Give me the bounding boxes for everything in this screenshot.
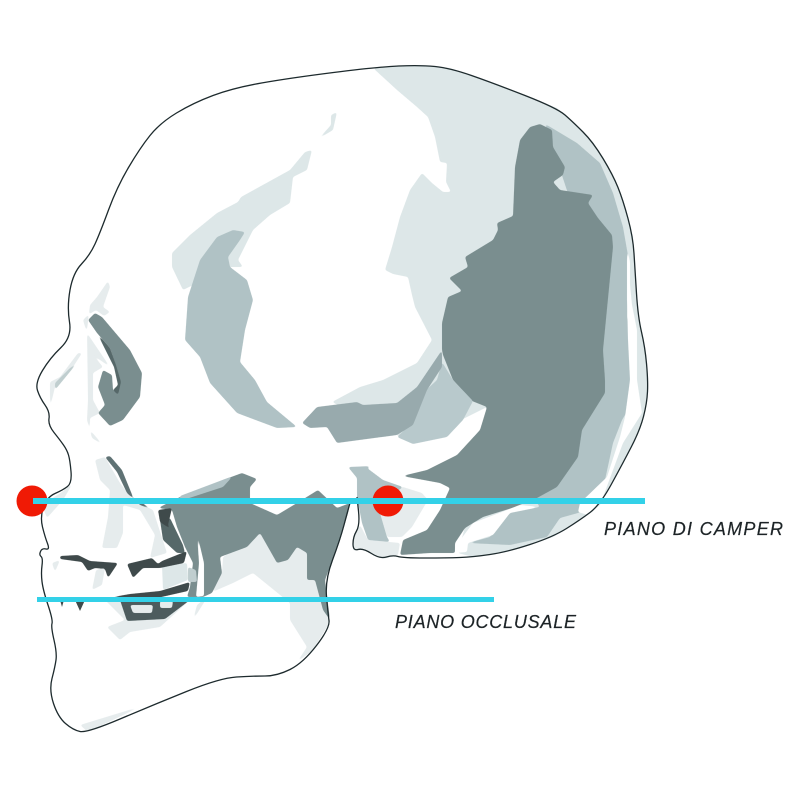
joint area inner light <box>380 487 428 537</box>
orbit inner dark edge <box>97 333 121 395</box>
mid-grey: temporal fossa <box>185 230 297 428</box>
nasal bone light <box>50 353 82 408</box>
red landmark: nose <box>16 486 48 516</box>
occlusal plane line <box>37 597 494 602</box>
label: piano di camper: PIANO DI CAMPER <box>604 519 783 539</box>
nasal bone mid <box>55 362 78 390</box>
skull outline <box>37 66 648 732</box>
aperture edge dark <box>105 456 153 510</box>
teeth pale right <box>188 567 197 582</box>
joint area light <box>353 525 400 559</box>
label: piano occlusale: PIANO OCCLUSALE <box>395 612 577 632</box>
pale grey: arch rear <box>397 362 473 444</box>
jaw upper tint <box>180 476 233 501</box>
cheek cleft dark <box>158 508 172 530</box>
light shading: rear cranium <box>332 65 648 557</box>
white bone patch at lower rear <box>455 505 540 553</box>
teeth pale <box>162 563 188 590</box>
chin light shading <box>80 706 142 732</box>
upper teeth shadow right <box>127 551 187 578</box>
mid-grey shading: rear cranium <box>468 124 633 545</box>
orbit surround light <box>83 281 110 445</box>
lower mouth light <box>105 600 190 640</box>
light shading: temple upper fragment <box>313 112 337 142</box>
teeth bottom shadow <box>107 582 190 598</box>
light shading: temple <box>172 150 312 290</box>
cheek cleft mid <box>160 518 185 553</box>
jaw light patch <box>193 533 330 662</box>
dark grey: rear cranium <box>400 124 613 555</box>
skull illustration <box>37 65 648 732</box>
upper teeth shadow left <box>60 555 118 578</box>
white slit <box>196 533 204 597</box>
tooth smudges <box>52 560 105 590</box>
mid-grey: zygomatic arch <box>302 350 442 443</box>
Camper plane line <box>33 498 645 504</box>
lower teeth frame <box>120 600 190 621</box>
red landmark: ear <box>372 486 404 516</box>
aperture surround light <box>95 457 167 558</box>
nose shadow light <box>42 483 73 518</box>
jaw dark <box>158 473 350 620</box>
orbit dark <box>88 313 142 426</box>
small tooth spikes <box>60 600 85 611</box>
joint area mid <box>348 466 403 542</box>
white bone strip near rear edge <box>578 247 642 515</box>
skull shading shapes <box>42 65 648 732</box>
